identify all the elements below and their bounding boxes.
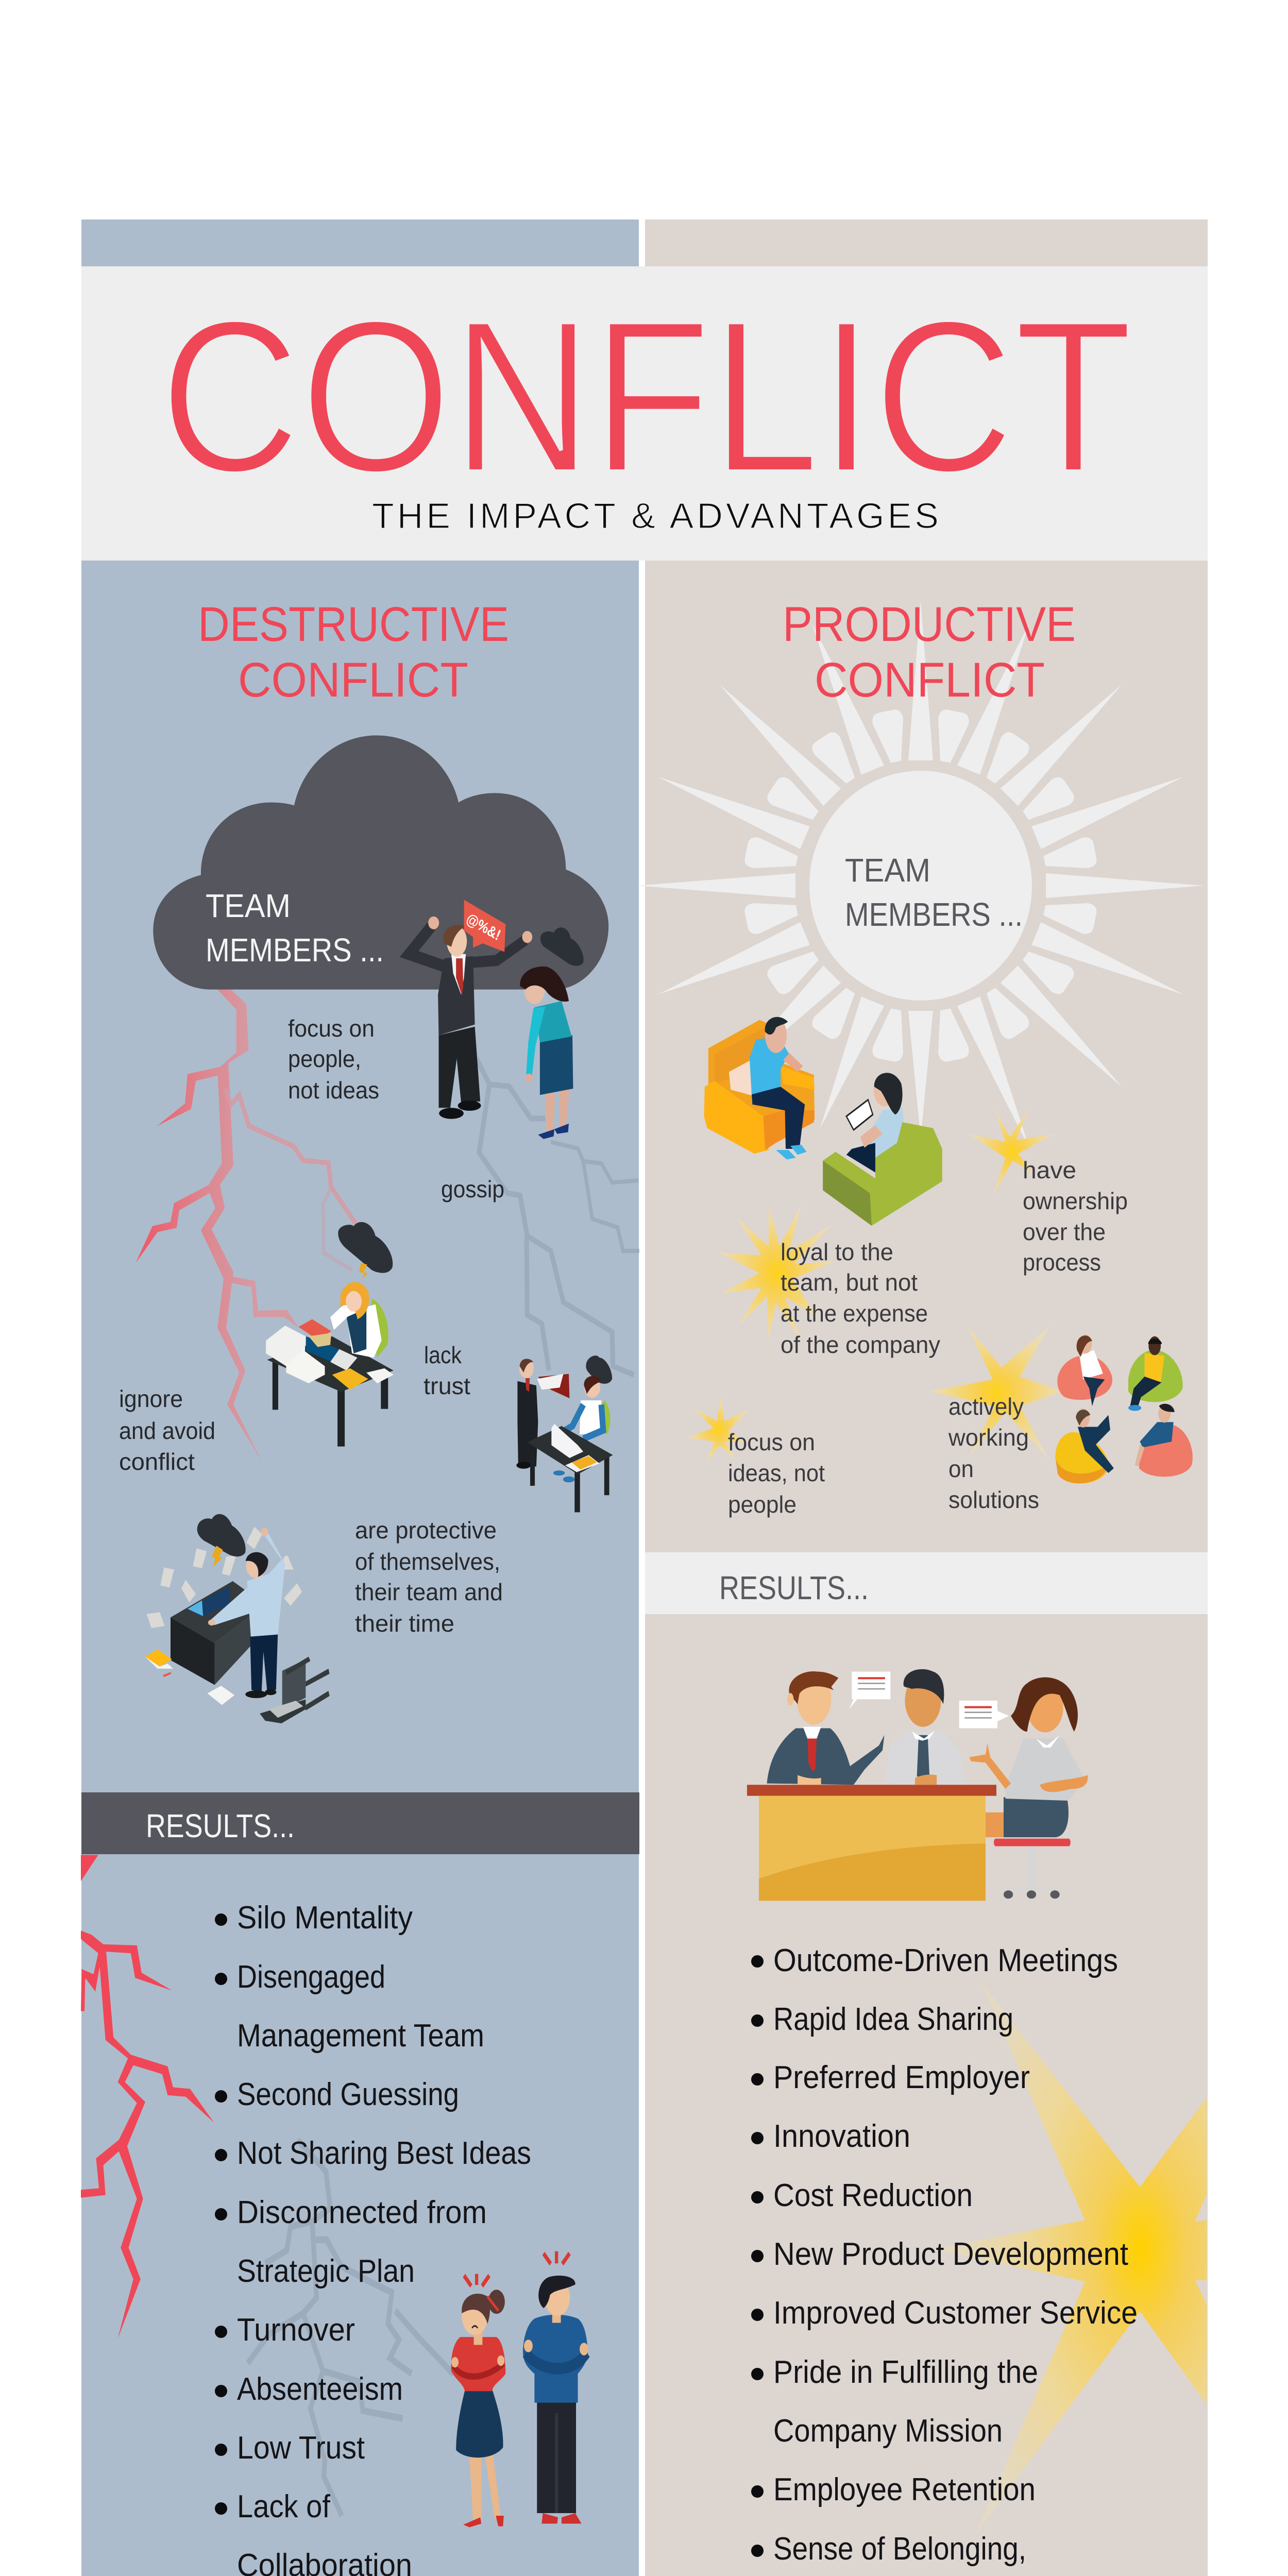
icon: burst 1 — [969, 1108, 1054, 1196]
list: destructive results: Disengaged — [237, 1959, 385, 1995]
text: have ownership over the process: over the — [1023, 1218, 1106, 1245]
icon: arguing man and bowed woman — [409, 900, 584, 1139]
lightning: pink bolts upper — [136, 990, 357, 1462]
cloud text: TEAM — [206, 887, 291, 924]
sun text — [845, 852, 1023, 933]
list: destructive results: Not Sharing Best Ideas — [237, 2136, 531, 2171]
text: have ownership over the process: ownership — [1023, 1188, 1128, 1214]
text: loyal to the team — [781, 1239, 940, 1358]
results bar: productive: RESULTS... — [719, 1569, 869, 1606]
heading: productive conflict: CONFLICT — [815, 653, 1045, 707]
subtitle: THE IMPACT & ADVANTAGES — [372, 496, 939, 536]
text: focus on people, not ideas: people, — [288, 1045, 361, 1072]
sun text: MEMBERS ... — [845, 896, 1023, 933]
icon: two people on armchairs — [704, 1017, 942, 1226]
icon: four people on bean bags — [1055, 1334, 1193, 1484]
text: are protective: of themselves, — [355, 1548, 500, 1575]
list: productive results: Pride in Fulfilling the — [773, 2354, 1038, 2390]
text: ignore and avoid conflict — [119, 1385, 215, 1475]
text: loyal to the team: at the expense — [781, 1300, 928, 1327]
text: loyal to the team: team, but not — [781, 1269, 918, 1296]
text: focus on ideas, not people: ideas, not — [728, 1460, 825, 1486]
list: productive results: Sense of Belonging, — [773, 2531, 1026, 2567]
list: destructive results: Low Trust — [237, 2430, 365, 2466]
panel: productive column background — [645, 219, 1208, 2576]
text: lack trust: trust — [423, 1372, 470, 1399]
results bar: destructive: RESULTS... — [146, 1807, 295, 1844]
text: actively working on solutions — [948, 1393, 1039, 1513]
text: focus on people, not ideas: not ideas — [288, 1077, 379, 1104]
list: destructive results: Management Team — [237, 2018, 484, 2054]
heading: destructive conflict — [198, 597, 509, 707]
sun text: TEAM — [845, 852, 930, 889]
text: actively working on solutions: working — [948, 1424, 1029, 1451]
lightning: gray bolts lower — [248, 2140, 453, 2516]
list: productive results: Employee Retention — [773, 2472, 1036, 2507]
icon: manager with megaphone and worker — [516, 1355, 613, 1512]
list: destructive results: Lack of — [237, 2489, 331, 2524]
title band — [81, 266, 1208, 561]
lightning: gray bolts upper — [477, 1059, 639, 1375]
text: loyal to the team: of the company — [781, 1331, 940, 1358]
text: ignore and avoid conflict: conflict — [119, 1448, 195, 1475]
text: actively working on solutions: on — [948, 1455, 974, 1482]
text: actively working on solutions: solutions — [948, 1486, 1039, 1513]
text: are protective: their team and — [355, 1579, 503, 1605]
list: productive results: Innovation — [773, 2119, 910, 2154]
text: loyal to the team: loyal to the — [781, 1239, 893, 1265]
sun illustration: productive conflict — [637, 601, 1204, 1153]
text: focus on people, not ideas: focus on — [288, 1015, 375, 1042]
icon: stressed woman at desk — [266, 1222, 394, 1447]
list: productive results: Cost Reduction — [773, 2178, 973, 2213]
text: gossip: gossip — [441, 1176, 504, 1202]
icon: burst 4 — [929, 1325, 1063, 1460]
list: destructive results: Turnover — [237, 2312, 355, 2348]
icon: burst 2 — [718, 1204, 836, 1341]
text: are protective: their time — [355, 1610, 454, 1637]
lightning: red bolts lower — [81, 1855, 214, 2338]
list: destructive results: Absenteeism — [237, 2371, 403, 2407]
text: lack trust — [423, 1342, 470, 1399]
text: ignore and avoid conflict: ignore — [119, 1385, 183, 1412]
heading: destructive conflict: CONFLICT — [238, 653, 468, 707]
list: productive results: New Product Development — [773, 2236, 1128, 2272]
list: destructive results — [215, 1900, 531, 2576]
list: productive results: Preferred Employer — [773, 2060, 1030, 2095]
heading: productive conflict: PRODUCTIVE — [783, 597, 1076, 652]
list: destructive results: Strategic Plan — [237, 2253, 415, 2289]
text: have ownership over the process: have — [1023, 1157, 1076, 1183]
cloud text: MEMBERS ... — [206, 931, 384, 969]
list: productive results: Outcome-Driven Meetings — [773, 1943, 1118, 1978]
text: are protective: are protective — [355, 1517, 497, 1544]
list: destructive results: Disconnected from — [237, 2195, 487, 2230]
text: focus on ideas, not people: focus on — [728, 1429, 815, 1455]
text: focus on ideas, not people — [728, 1429, 825, 1518]
results bar: productive — [645, 1552, 1208, 1614]
list: productive results: Company Mission — [773, 2413, 1003, 2449]
title: CONFLICT — [160, 276, 1133, 518]
heading: destructive conflict: DESTRUCTIVE — [198, 597, 509, 652]
cloud text — [206, 887, 384, 969]
list: destructive results: Silo Mentality — [237, 1900, 413, 1936]
list: productive results — [751, 1943, 1138, 2576]
text: focus on people, not ideas — [288, 1015, 379, 1104]
text: ignore and avoid conflict: and avoid — [119, 1417, 215, 1444]
icon: frustrated man with desk and tipped chair — [145, 1514, 330, 1723]
icon: angry couple — [451, 2251, 588, 2527]
text: actively working on solutions: actively — [948, 1393, 1024, 1420]
icon: arguing man and bowed woman: @%&! — [464, 909, 503, 944]
text: have ownership over the process: process — [1023, 1249, 1101, 1276]
results bar: destructive — [81, 1792, 639, 1854]
list: productive results: Rapid Idea Sharing — [773, 2002, 1013, 2037]
list: productive results: Improved Customer Service — [773, 2295, 1138, 2331]
text: are protective — [355, 1517, 503, 1637]
icon: large yellow burst — [933, 1980, 1207, 2535]
icon: burst 3 — [687, 1396, 750, 1462]
list: destructive results: Second Guessing — [237, 2077, 459, 2112]
text: lack trust: lack — [424, 1342, 462, 1368]
text: have ownership over the process — [1023, 1157, 1128, 1276]
storm cloud — [153, 735, 608, 990]
panel: destructive column background — [81, 219, 639, 2576]
text: focus on ideas, not people: people — [728, 1491, 796, 1518]
icon: team meeting at desk — [747, 1669, 1088, 1901]
heading: productive conflict — [783, 597, 1076, 707]
